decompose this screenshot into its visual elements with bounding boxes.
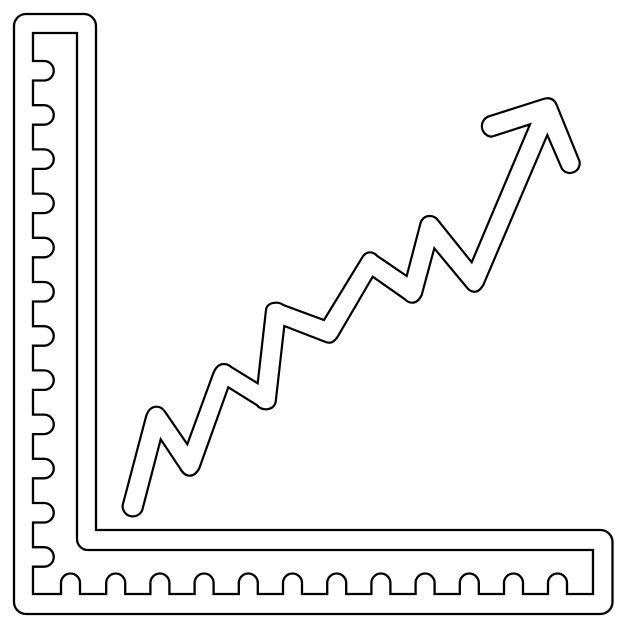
zigzag rising arrow: [123, 98, 580, 516]
